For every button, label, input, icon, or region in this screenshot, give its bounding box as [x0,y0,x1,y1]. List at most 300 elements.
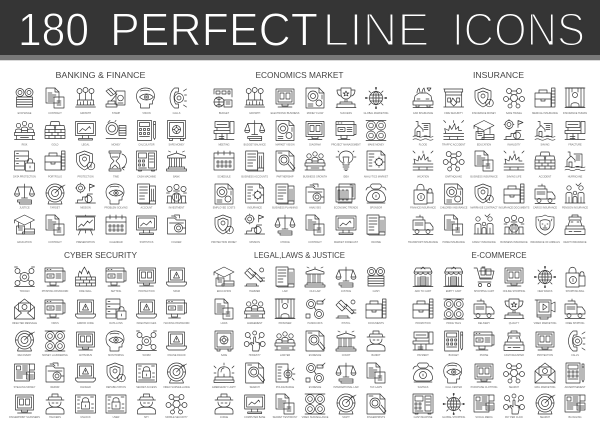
icon: fingerprint scanners [9,395,40,419]
icon: evidence: EVIDENCE [309,354,322,357]
icon: growth [245,88,265,115]
heading: CYBER SECURITY [64,250,137,260]
icon: calculator: CALCULATOR [138,143,155,146]
icon: promotion: PROMOTION [415,322,431,325]
icon: schedule [214,151,234,178]
icon: purse [474,332,494,357]
icon: sponsor [366,184,386,209]
icon: analysis [306,184,324,209]
icon: blogging: BLOGGING [568,416,582,419]
icon: presentation [76,215,96,244]
icon: calls [170,88,186,115]
icon: protection: PROTECTION [139,290,155,293]
icon: insurance documents [499,184,530,209]
icon: price tags [444,299,464,325]
icon: search [504,364,524,389]
icon: shopping cart: SHOPPING CART [474,290,495,293]
icon: repair: REPAIR [51,386,60,389]
icon: tax laws: TAX LAWS [370,386,382,389]
icon: contract: CONTRACT [48,112,62,115]
icon: fracture: FRACTURE [568,143,582,146]
icon: stamp: STAMP [112,112,120,115]
icon: presentation: PRESENTATION [76,241,95,244]
icon: exchange [16,88,33,115]
icon: analysis: ANALYSIS [309,206,321,209]
icon: mission [245,214,265,244]
icon: setting: SETTING [111,290,121,293]
icon: hacking password: HACKING PASSWORD [164,322,190,325]
icon: social media: SOCIAL MEDIA [475,416,493,419]
icon: car insurance: CAR INSURANCE [413,112,433,115]
icon: flood [413,122,433,146]
icon: fire wall: FIRE WALL [79,290,93,293]
icon: safe [215,331,233,357]
icon: income [367,215,385,244]
icon: business planning: BUSINESS PLANNING [272,206,298,209]
icon: new ranks [534,266,556,293]
icon: video surveillance: VIDEO SURVEILLANCE [302,416,329,419]
icon: data protection: DATA PROTECTION [13,176,36,178]
icon: purse: PURSE [480,354,489,357]
icon: unlock: UNLOCK [80,416,91,419]
icon: unlock [76,395,96,419]
icon: budget balance: BUDGET BALANCE [244,143,266,146]
icon: calls [568,331,585,357]
icon: analytics market: ANALYTICS MARKET [364,176,389,178]
icon: safe money: SAFE MONEY [169,143,185,146]
icon: secret testimony [273,394,298,419]
icon: income: INCOME [371,241,381,244]
icon: laws [215,299,233,325]
icon: free shipping: FREE SHIPPING [566,322,585,325]
icon: choice [275,215,295,244]
icon: error code: ERROR CODE [77,322,94,325]
icon: gold [45,122,65,146]
icon: fire security: FIRE SECURITY [444,112,463,115]
icon: antivirus [76,332,94,357]
icon: earthquake [443,152,464,178]
icon: documents: DOCUMENTS [368,322,384,325]
icon: rehabilitation: REHABILITATION [106,386,126,389]
icon: setting [106,268,126,293]
icon: children insurance: CHILDREN INSURANCE [440,206,468,209]
icon: partnership [276,151,295,178]
icon: fingerprints: FINGERPRINTS [367,416,385,419]
icon: empty cart [444,267,464,293]
icon: portfolio [45,151,65,178]
icon: documents [366,299,386,325]
icon: saving: SAVING [540,143,550,146]
icon: flood: FLOOD [419,143,427,146]
icon: global shopping [442,393,465,419]
icon: education: EDUCATION [477,143,491,146]
icon: calendar: CALENDAR [109,241,123,244]
icon: pension insurance: PENSION INSURANCE [562,206,588,209]
heading: ECONOMICS MARKET [256,70,344,80]
icon: budget [214,89,232,115]
icon: project management: PROJECT MANAGEMENT [331,143,361,146]
icon: education [14,215,34,244]
icon: handcuffs: HANDCUFFS [307,322,323,325]
icon: fire security [444,89,464,115]
icon: old law: OLD LAW [310,290,321,293]
icon: portfolio: PORTFOLIO [48,176,62,178]
icon: quality [504,299,524,325]
icon: saving life [504,151,524,178]
icon: evidence: EVIDENCE [309,386,322,389]
icon: lawyer: LAWYER [280,354,290,357]
icon: search: SEARCH [250,386,260,389]
icon: search [536,394,555,419]
icon: court [336,331,356,357]
icon: bank [166,151,186,178]
icon: home insurance [443,215,465,244]
icon: market forecast [334,216,359,244]
icon: medical insurance: MEDICAL INSURANCE [532,112,558,115]
icon: make money [366,120,386,146]
icon: promotion [413,299,433,325]
icon: diagram: DIAGRAM [309,143,321,146]
icon: social media [474,395,494,419]
icon: insurance documents: INSURANCE DOCUMENTS [499,206,530,209]
icon: evidence [306,331,325,357]
title: 180 PERFECT LINE ICONS [18,4,585,56]
icon: problem solving: PROBLEM SOLVING [104,206,128,209]
icon: shopping bag [566,267,585,293]
icon: spy [138,394,156,419]
icon: success: SUCCESS [340,112,352,115]
icon: accident [535,152,555,178]
icon: repair [46,363,64,389]
panel: cyber security [9,250,190,419]
icon: problem solving [104,184,128,209]
icon: video surveillance [302,394,329,419]
icon: lawyer [275,332,295,357]
icon: hurricane [565,152,585,178]
icon: budget: BUDGET [449,354,459,357]
icon: price tags: PRICE TAGS [446,322,461,325]
icon: prisoner: PRISONER [279,322,292,325]
icon: money laundering: MONEY LAUNDERING [42,354,68,357]
icon: mail marketing [535,363,555,389]
icon: protection [138,268,156,293]
icon: insurance human: INSURANCE HUMAN [563,112,587,115]
icon: justice [14,184,34,209]
icon: insurance of animals: INSURANCE OF ANIMALS [530,241,560,244]
icon: bandit: BANDIT [372,354,381,357]
icon: police badge: POLICE BADGE [276,386,294,389]
icon: make money: MAKE MONEY [368,143,385,146]
icon: safe travel [504,88,524,115]
icon: secret testimony: SECRET TESTIMONY [273,416,298,419]
icon: mobile security [165,394,188,419]
icon: transport insurance: TRANSPORT INSURANCE [408,241,438,244]
icon: investment [166,184,186,209]
icon: target: TARGET [50,206,60,209]
icon: call center: CALL CENTER [445,386,462,389]
icon: payment: PAYMENT [417,354,429,357]
icon: worm: WORM [142,354,150,357]
icon: market forecast: MARKET FORECAST [334,241,359,244]
icon: statistics [136,216,156,244]
icon: contract: CONTRACT [48,241,62,244]
icon: video marketing: VIDEO MARKETING [534,322,556,325]
icon: risk: RISK [22,143,28,146]
icon: safe money [168,120,186,146]
icon: infected files [136,300,157,325]
icon: justice: JUSTICE [19,206,30,209]
icon: mail marketing: MAIL MARKETING [535,386,555,389]
icon: purchase clothing [471,364,498,389]
icon: virus [45,300,65,325]
icon: gold: GOLD [52,143,59,146]
icon: infected message: INFECTED MESSAGE [12,322,37,325]
icon: business growth: BUSINESS GROWTH [303,176,327,178]
icon: global shopping: GLOBAL SHOPPING [442,416,465,419]
icon: insurance money: INSURANCE MONEY [472,112,496,115]
icon: family insurance [472,214,496,244]
icon: hammer: HAMMER [249,290,260,293]
icon: cash machine [136,151,156,178]
icon: education: EDUCATION [17,241,32,244]
icon: business insurance: BUSINESS INSURANCE [470,176,498,178]
icon: market vision: MARKET VISION [275,143,295,146]
icon: fracture [565,122,585,146]
icon: law [276,267,294,293]
icon: user [106,395,126,419]
heading: E-COMMERCE [472,250,527,260]
icon: analytics market [364,151,389,178]
icon: calls: CALLS [571,354,579,357]
icon: meeting [214,122,234,146]
icon: insurance human [563,88,587,115]
icon: saving [535,122,555,146]
icon: investment: INVESTMENT [169,206,185,209]
icon: cash [368,268,384,293]
icon: business growth [303,152,327,178]
icon: stealing money [14,364,36,389]
heading: INSURANCE [473,70,524,80]
icon: emergency light: EMERGENCY LIGHT [212,386,236,389]
icon: monitoring: MONITORING [108,354,124,357]
icon: judge [215,394,233,419]
icon: cash register [504,331,524,357]
icon: sight [337,394,356,419]
icon: shopping cart [474,267,495,293]
icon: rehabilitation [106,363,126,389]
icon: traffic accident [442,120,466,146]
icon: hackers: HACKERS [49,416,61,419]
icon: protection [76,151,95,178]
icon: project management [331,122,361,146]
icon: spam: SPAM [173,290,180,293]
icon: call center [444,363,462,389]
icon: computer base [244,395,266,419]
icon: risk [14,121,34,146]
icon: infected message [12,299,37,325]
icon: search [246,363,265,389]
icon: pay per click [504,394,524,419]
icon: computer base: COMPUTER BASE [244,416,266,419]
icon: fingerprint scanners: FINGERPRINT SCANNERS [9,416,40,419]
icon: invalidity [504,120,524,146]
icon: accident: ACCIDENT [539,176,552,178]
icon: safe travel: SAFE TRAVEL [506,112,523,115]
title: 180 PERFECT LINE ICONS: PERFECT [110,4,318,56]
icon: time [109,151,126,178]
icon: bank: BANK [173,176,180,178]
icon: business accounts: BUSINESS ACCOUNTS [241,176,268,178]
icon: car insurance [413,88,433,115]
icon: video surveillance: VIDEO SURVEILLANCE [163,386,190,389]
icon: calculator [138,120,156,146]
icon: savings: SAVINGS [418,386,429,389]
icon: mission: MISSION [250,241,260,244]
icon: home insurance: HOME INSURANCE [443,241,465,244]
icon: advertisement [565,363,586,389]
icon: employee costs [213,184,236,209]
icon: phishing password [42,268,68,293]
icon: money [106,120,126,146]
icon: pension insurance [562,183,588,209]
icon: trojan [14,267,34,293]
icon: idea: IDEA [343,176,349,178]
icon: delivery: DELIVERY [478,322,490,325]
icon: law: LAW [282,290,288,293]
icon: trojan: TROJAN [20,290,30,293]
icon: mission [76,183,96,209]
icon: vacation [413,151,433,178]
icon: phishing password: PHISHING PASSWORD [42,290,68,293]
icon: partnership: PARTNERSHIP [276,176,294,178]
icon: international law [333,363,359,389]
icon: electronic business [271,89,300,115]
icon: contract [46,88,64,115]
icon: evidence [306,363,325,389]
icon: insurance money [472,88,496,115]
icon: blogging [565,395,585,419]
icon: hammer [245,268,265,293]
icon: success [336,88,356,115]
icon: electronic business: ELECTRONIC BUSINESS [271,112,300,115]
icon: empty cart: EMPTY CART [446,290,462,293]
icon: online fraud: ONLINE FRAUD [167,354,186,357]
icon: cargo insurance: CARGO INSURANCE [533,206,557,209]
icon: justice [336,267,356,293]
icon: stealing money: STEALING MONEY [14,386,36,389]
icon: prisoner [275,299,295,325]
icon: search: SEARCH [509,386,519,389]
icon: traffic accident: TRAFFIC ACCIDENT [442,143,466,146]
icon: cash: CASH [373,290,380,293]
icon: mission: MISSION [80,206,91,209]
icon: growth: GROWTH [80,112,91,115]
icon: contract [46,215,64,244]
icon: hackers [46,394,64,419]
icon: pistol: PISTOL [342,322,351,325]
icon: money laundering [42,331,68,357]
panel: economics market [211,70,389,244]
icon: secret access [136,364,157,389]
icon: budget: BUDGET [219,112,230,115]
icon: cash machine: CASH MACHINE [137,176,156,178]
icon: family insurance: FAMILY INSURANCE [472,241,496,244]
icon: cash machine [413,394,433,419]
panel: legal, laws & justice [212,250,386,419]
icon: children insurance [440,184,468,209]
icon: online shopping: ONLINE SHOPPING [503,290,525,293]
icon: stamp [106,88,125,115]
icon: meeting: MEETING [218,143,230,146]
icon: protection [536,332,554,357]
icon: education [474,120,494,146]
icon: employee costs: EMPLOYEE COSTS [213,206,236,209]
icon: diagram [306,122,324,146]
icon: laws: LAWS [221,322,228,325]
icon: error code [76,300,96,325]
icon: legal [76,122,96,146]
icon: insurance [246,184,264,209]
icon: danger [76,364,96,389]
icon: hacking password [164,300,190,325]
header band [0,0,600,61]
icon: honesty [244,331,265,357]
icon: medical insurance [532,88,558,115]
icon: online fraud [166,332,186,357]
icon: add to cart: ADD TO CART [415,290,432,293]
icon: old law [305,267,325,293]
icon: protection: PROTECTION [78,176,94,178]
heading: BANKING & FINANCE [56,70,146,80]
icon: statistics: STATISTICS [140,241,154,244]
icon: global marketing [364,87,389,115]
icon: exchange: EXCHANGE [18,112,32,115]
icon: cash register: CASH REGISTER [504,354,524,357]
icon: cash machine: CASH MACHINE [414,416,433,419]
icon: monitoring [106,331,124,357]
icon: video surveillance [163,363,190,389]
icon: growth: GROWTH [249,112,260,115]
icon: calls: CALLS [173,112,181,115]
icon: insurance: INSURANCE [248,206,262,209]
icon: hurricane: HURRICANE [568,176,583,178]
icon: business insurance [470,151,498,178]
icon: sponsor: SPONSOR [370,206,382,209]
icon: invalidity: INVALIDITY [507,143,521,146]
icon: death insurance [563,215,587,244]
icon: handcuffs [306,299,325,325]
icon: money flow [306,88,324,115]
icon: vision: VISION [142,112,151,115]
icon: search: SEARCH [540,416,550,419]
panel: e-commerce [413,250,586,419]
icon: transport insurance [408,215,438,244]
icon: emergency light [212,363,236,389]
icon: data loss: DATA LOSS [109,322,123,325]
icon: protection: PROTECTION [537,354,553,357]
icon: marriage contract: MARRIAGE CONTRACT [470,206,498,209]
icon: calendar [106,215,126,244]
icon: cargo insurance [533,184,557,209]
icon: user: USER [113,416,120,419]
icon: tax laws [367,363,385,389]
icon: infected files: INFECTED FILES [137,322,157,325]
icon: police badge [276,364,295,389]
icon: mobile security: MOBILE SECURITY [165,416,188,419]
icon: delivery [474,299,494,325]
heading: LEGAL,LAWS & JUSTICE [254,250,345,260]
icon: protection money [211,215,237,244]
